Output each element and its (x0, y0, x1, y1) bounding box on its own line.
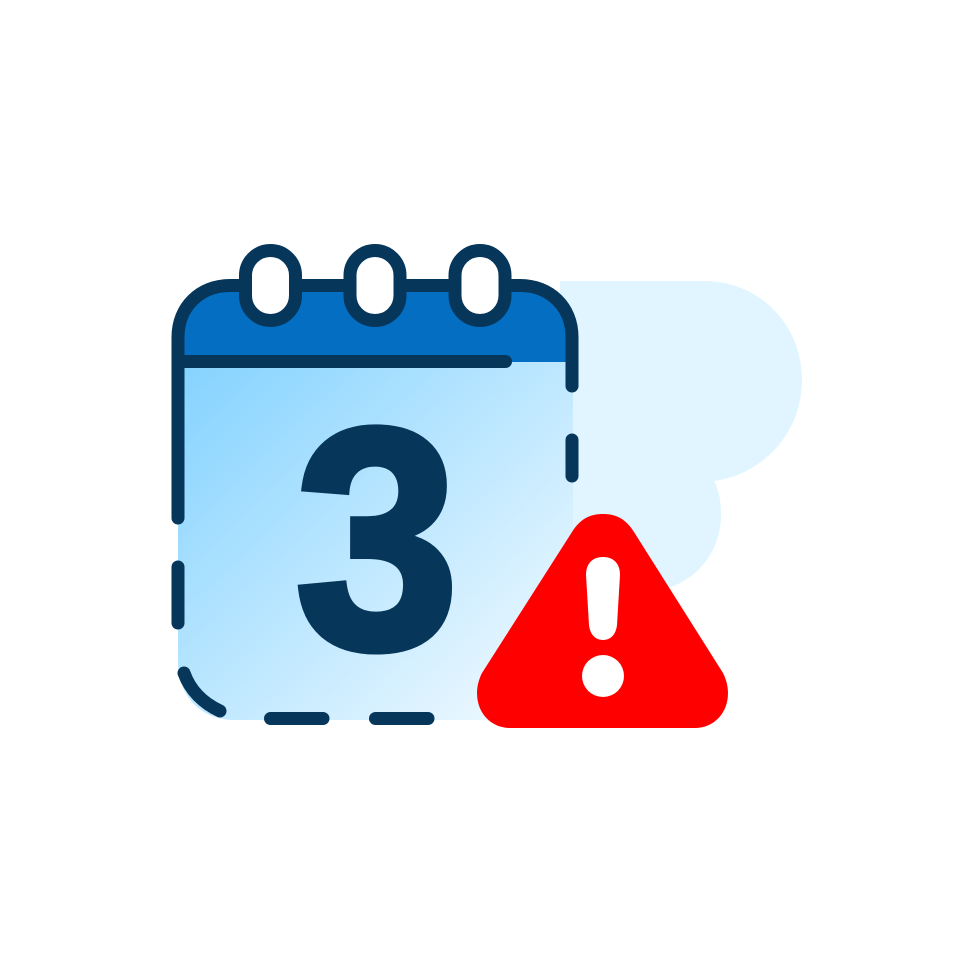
calendar header (178, 286, 572, 362)
date number: 3 (295, 365, 459, 714)
background cloud shape (560, 281, 802, 590)
warning triangle (477, 514, 728, 728)
exclamation mark (582, 557, 624, 697)
calendar rings (246, 250, 505, 320)
calendar page (178, 361, 573, 720)
calendar outline (178, 286, 572, 718)
